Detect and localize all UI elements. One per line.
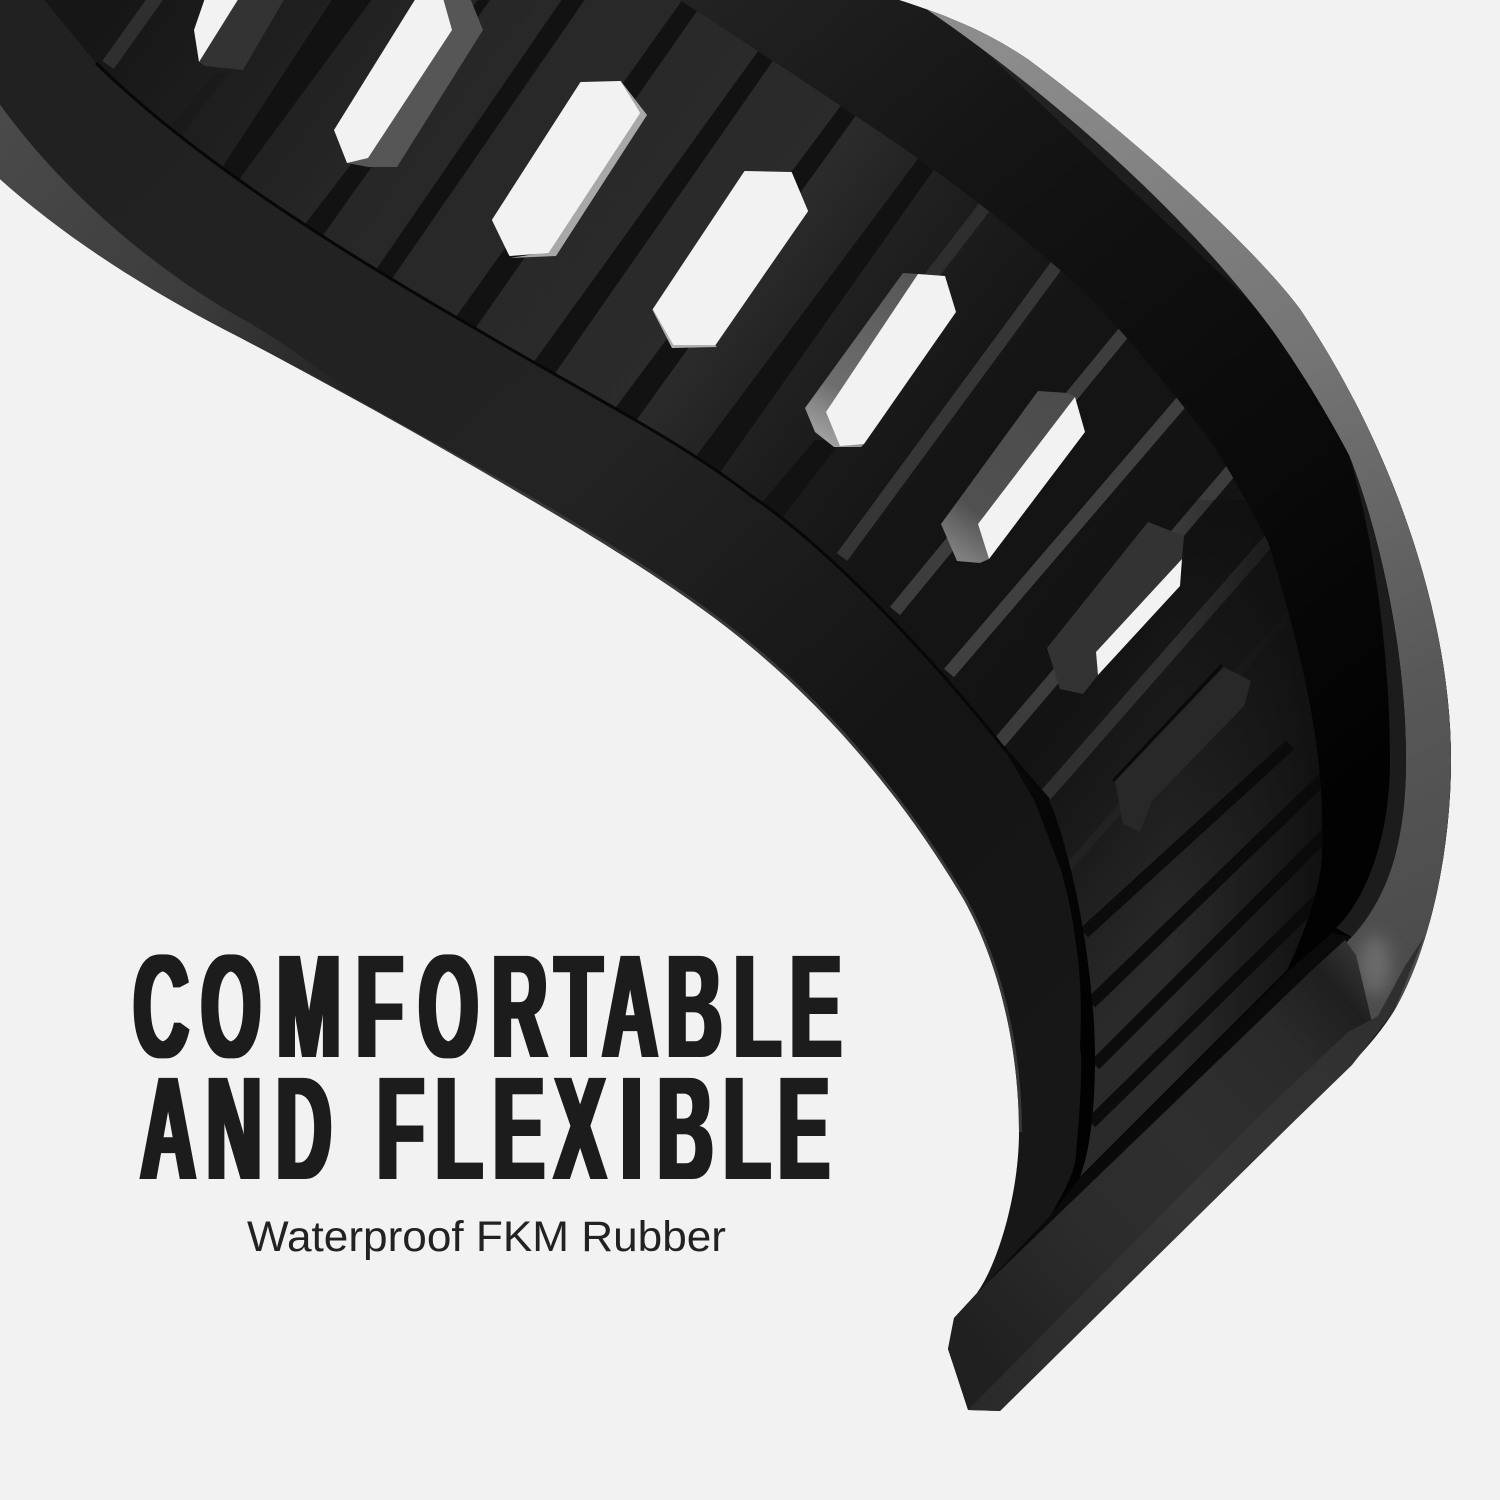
heading [133,924,841,1210]
heading line 1: COMFORTABLE [133,924,841,1088]
center strap with stripes [0,0,1340,1200]
slot 7 [1047,522,1184,694]
slot 3 [493,80,647,258]
inner dark step of rim [1336,455,1406,937]
knee highlight [1359,935,1391,995]
slot 6 [941,391,1085,563]
right side shade [1201,500,1322,1038]
slot 2 [334,0,483,167]
slot 8 closed [1113,665,1251,832]
subtitle: Waterproof FKM Rubber [247,1213,726,1261]
lower dark grooves [1084,745,1335,1123]
end cap lower bevel [968,937,1424,1411]
slot 4 [652,172,807,348]
textured light stripes [108,0,1296,868]
recess and top wall [836,0,1451,1214]
strap seam line [96,63,1049,800]
end cap channel [977,933,1352,1293]
lower left grey edge [0,104,372,409]
dark grooves [223,0,934,516]
slot 5 [805,273,956,447]
lower edge highlight [300,372,1019,1132]
heading line 2: AND FLEXIBLE [141,1046,829,1210]
slot 1 [194,0,285,70]
outer grey rim [899,0,1451,1030]
strap surface [0,0,1340,1190]
end cap face [948,940,1372,1410]
clipped band layers [0,0,1460,1215]
